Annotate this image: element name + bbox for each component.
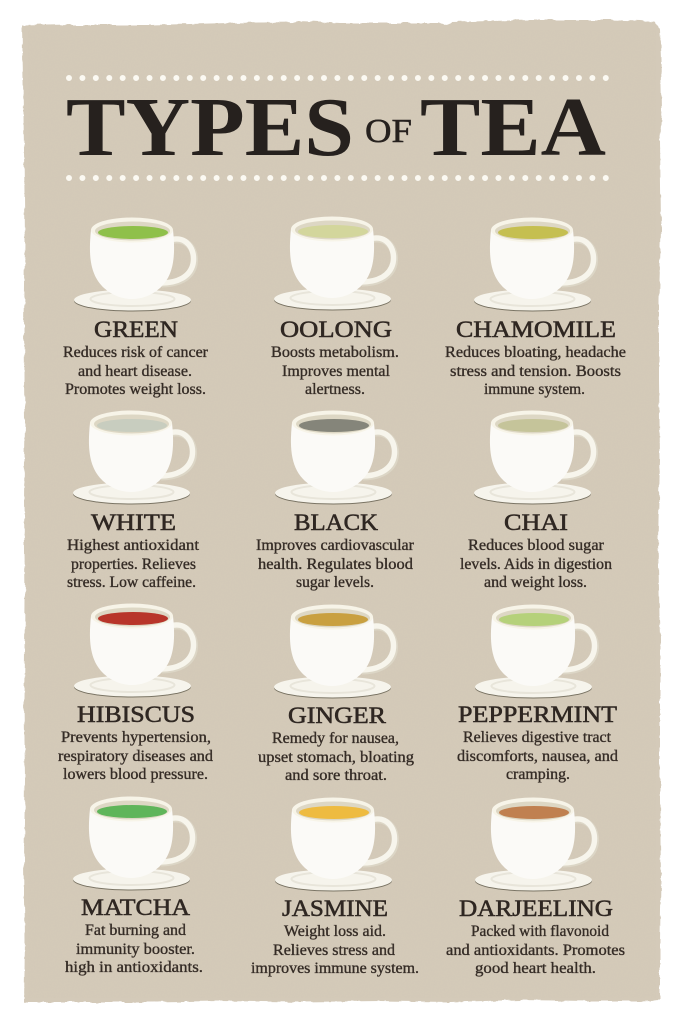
card: matcha	[65, 796, 203, 976]
description: jasmine	[251, 923, 419, 977]
description: matcha: immunity booster.	[76, 941, 195, 958]
card: jasmine	[251, 798, 419, 977]
heading: green: GREEN	[94, 317, 178, 343]
title: Types of Tea: OF	[365, 113, 412, 150]
description: chamomile: immune system.	[484, 381, 585, 398]
heading: white: WHITE	[91, 510, 176, 536]
description: black: health. Regulates blood	[258, 556, 413, 573]
description: chamomile: stress and tension. Boosts	[450, 363, 621, 380]
description: ginger	[258, 730, 414, 784]
description: chai: levels. Aids in digestion	[460, 556, 612, 573]
description: black: Improves cardiovascular	[256, 537, 415, 554]
card: ginger	[258, 604, 414, 784]
card: hibiscus	[58, 604, 213, 783]
description: peppermint: Relieves digestive tract	[463, 729, 612, 746]
description: peppermint: discomforts, nausea, and	[457, 748, 618, 765]
description: oolong: Boosts metabolism.	[271, 344, 399, 361]
description: chai	[460, 537, 612, 591]
description: matcha: high in antioxidants.	[65, 959, 203, 976]
description: peppermint: cramping.	[506, 766, 570, 783]
description: darjeeling: good heart health.	[475, 960, 596, 977]
description: darjeeling: and antioxidants. Promotes	[446, 942, 625, 959]
title: Types of Tea: TEA	[420, 81, 606, 174]
description: ginger: upset stomach, bloating	[258, 749, 414, 766]
description: oolong: Improves mental	[282, 363, 390, 380]
bottom dotted rule	[69, 175, 606, 181]
title: Types of Tea: TYPES	[66, 81, 354, 174]
description: jasmine: Relieves stress and	[273, 942, 395, 959]
icon: ginger tea cup	[274, 604, 395, 698]
card: darjeeling	[446, 798, 625, 977]
heading: black: BLACK	[294, 510, 378, 536]
card: black	[256, 410, 415, 591]
card: white	[67, 410, 200, 591]
description: chamomile: Reduces bloating, headache	[445, 344, 626, 361]
heading: jasmine: JASMINE	[282, 896, 388, 922]
description: jasmine: Weight loss aid.	[284, 923, 386, 940]
description: green: Promotes weight loss.	[65, 381, 206, 398]
card: chai	[460, 410, 612, 591]
description: darjeeling: Packed with flavonoid	[471, 923, 609, 940]
icon: hibiscus tea cup	[74, 604, 195, 698]
description: green: Reduces risk of cancer	[63, 344, 209, 361]
description: matcha: Fat burning and	[85, 922, 186, 939]
top dotted rule	[69, 75, 606, 81]
description: oolong: alertness.	[305, 381, 365, 398]
icon: white tea cup	[73, 410, 194, 504]
description: green: and heart disease.	[78, 363, 192, 380]
heading: darjeeling: DARJEELING	[459, 896, 613, 922]
description: hibiscus: respiratory diseases and	[58, 748, 213, 765]
title: Types of Tea	[66, 81, 606, 174]
heading: ginger: GINGER	[288, 703, 386, 729]
description: chai: Reduces blood sugar	[468, 537, 605, 554]
heading: oolong: OOLONG	[280, 317, 392, 343]
description: oolong	[271, 344, 399, 398]
card: green	[63, 218, 209, 398]
description: hibiscus: lowers blood pressure.	[63, 766, 208, 783]
icon: chamomile tea cup	[474, 218, 595, 312]
description: chai: and weight loss.	[484, 574, 587, 591]
icon: matcha tea cup	[73, 796, 194, 890]
description: white: stress. Low caffeine.	[67, 574, 196, 591]
icon: black tea cup	[275, 410, 396, 504]
description: hibiscus	[58, 729, 213, 783]
heading: chamomile: CHAMOMILE	[456, 317, 616, 343]
description: jasmine: improves immune system.	[251, 960, 419, 977]
description: ginger: Remedy for nausea,	[272, 730, 399, 747]
icon: peppermint tea cup	[475, 604, 596, 698]
description: peppermint	[457, 729, 618, 783]
description: ginger: and sore throat.	[285, 767, 387, 784]
card: peppermint	[457, 604, 618, 783]
heading: peppermint: PEPPERMINT	[458, 702, 617, 728]
icon: oolong tea cup	[274, 216, 395, 310]
description: matcha	[65, 922, 203, 976]
icon: darjeeling tea cup	[475, 798, 596, 892]
description: white	[67, 537, 200, 591]
description: white: properties. Relieves	[71, 556, 196, 573]
heading: chai: CHAI	[504, 510, 568, 536]
heading: hibiscus: HIBISCUS	[77, 702, 195, 728]
description: black	[256, 537, 415, 591]
icon: green tea cup	[74, 218, 195, 312]
description: white: Highest antioxidant	[67, 537, 200, 554]
card: chamomile	[445, 218, 626, 398]
description: hibiscus: Prevents hypertension,	[61, 729, 211, 746]
icon: jasmine tea cup	[275, 798, 396, 892]
heading: matcha: MATCHA	[81, 895, 190, 921]
icon: chai tea cup	[474, 410, 595, 504]
description: chamomile	[445, 344, 626, 398]
description: green	[63, 344, 209, 398]
description: darjeeling	[446, 923, 625, 977]
card: oolong	[271, 216, 399, 398]
description: black: sugar levels.	[296, 574, 374, 591]
